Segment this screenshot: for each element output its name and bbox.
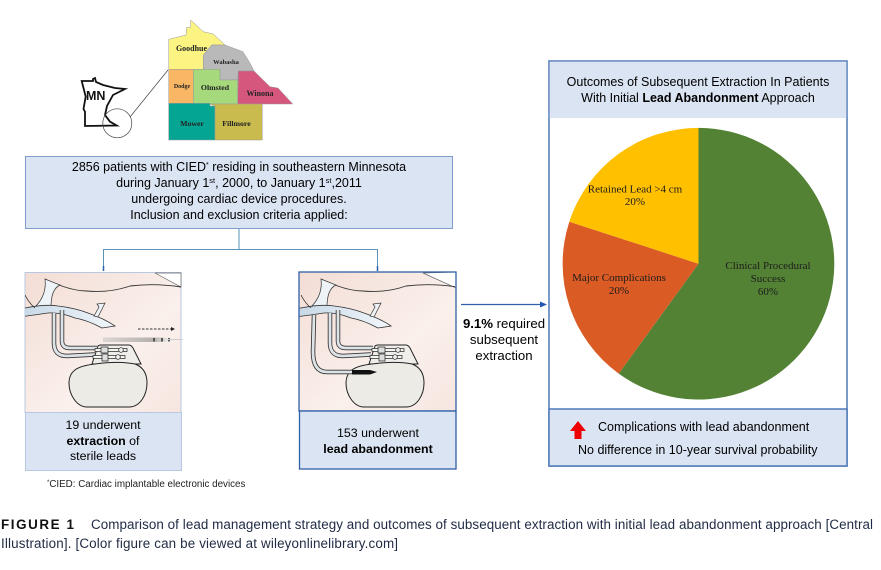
panel: outcome summary: Complications with lead abandonment	[598, 420, 810, 434]
text: required subsequent extraction: 9.1% required	[463, 316, 545, 331]
slice: clinical procedural success 60%	[619, 128, 834, 400]
slice: clinical procedural success 60%: 60%	[758, 286, 778, 298]
heading: outcomes title	[550, 62, 846, 118]
caption: Comparison of lead management strategy and outcomes of subsequent extraction with initial lead abandonment approach [Central	[91, 517, 873, 532]
slice: clinical procedural success 60%: Clinical Procedural	[725, 260, 811, 272]
map: southeastern Minnesota counties	[82, 20, 293, 140]
panel: abandonment result: 153 underwent	[337, 426, 420, 440]
caption	[1, 517, 873, 551]
slice: retained lead 20%: Retained Lead >4 cm	[588, 184, 683, 196]
arrow: split to two strategies	[104, 229, 378, 271]
text: required subsequent extraction: extraction	[475, 348, 533, 363]
county: Goodhue	[169, 20, 225, 69]
county: Goodhue: Goodhue	[176, 44, 208, 53]
panel: sterile lead extraction illustration	[19, 272, 183, 412]
county: Dodge: Dodge	[174, 84, 190, 90]
footnote: CIED definition: CIED: Cardiac implantable electronic devices	[49, 479, 245, 490]
panel: patient population text box: Inclusion and exclusion criteria applied:	[130, 208, 348, 222]
panel: patient population text box: undergoing cardiac device procedures.	[131, 192, 347, 206]
panel: abandonment result	[300, 411, 456, 469]
arrow: extraction direction	[138, 327, 175, 331]
panel: patient population text box: , 2000, to January 1	[215, 176, 326, 190]
panel: patient population text box: st	[326, 176, 332, 185]
panel: lead abandonment illustration	[295, 272, 457, 411]
slice: major complications 20%: Major Complications	[572, 272, 666, 284]
arrow: to outcomes panel	[461, 302, 547, 308]
panel: patient population text box: 2856 patients with CIED	[72, 160, 206, 174]
text: required subsequent extraction	[463, 316, 545, 363]
caption: Illustration]. [Color figure can be viewed at wileyonlinelibrary.com]	[1, 536, 398, 551]
county: Olmsted	[193, 69, 238, 104]
county: Winona: Winona	[247, 89, 273, 98]
panel: patient population text box	[26, 156, 452, 228]
panel: patient population text box: ,2011	[331, 176, 362, 190]
icon: Minnesota outline: MN	[86, 89, 105, 103]
icon: Minnesota outline	[82, 78, 125, 126]
panel: extraction result	[26, 412, 182, 470]
panel: abandonment result: lead abandonment	[323, 442, 433, 456]
panel: extraction result: 19 underwent	[65, 418, 141, 432]
panel: extraction result: extraction of	[66, 434, 140, 448]
extracted lead	[103, 338, 183, 342]
panel: patient population text box: residing in southeastern Minnesota	[209, 160, 406, 174]
pie chart	[563, 128, 834, 400]
slice: major complications 20%: 20%	[609, 285, 629, 297]
county: Fillmore: Fillmore	[222, 119, 251, 128]
panel: outcomes	[549, 61, 847, 466]
panel: outcome summary	[549, 409, 847, 466]
panel: extraction result: sterile leads	[70, 449, 136, 463]
county: Winona	[238, 71, 293, 104]
footnote: CIED definition: *	[47, 480, 50, 486]
county: Wabasha: Wabasha	[213, 59, 240, 66]
county: Wabasha	[203, 45, 254, 80]
slice: major complications 20%	[563, 222, 698, 374]
slice: retained lead 20%: 20%	[625, 196, 645, 208]
slice: clinical procedural success 60%: Success	[751, 273, 785, 285]
heading: outcomes title: Outcomes of Subsequent Extraction In Patients	[567, 75, 829, 89]
slice: retained lead 20%	[569, 128, 698, 264]
panel: patient population text box: during January 1	[116, 176, 209, 190]
abandoned lead	[313, 315, 377, 374]
panel: patient population text box: *	[206, 162, 209, 169]
county: Mower	[169, 103, 215, 140]
heading: outcomes title: With Initial Lead Abandonment Approach	[581, 91, 815, 105]
county: Olmsted: Olmsted	[201, 83, 230, 92]
panel: outcome summary: No difference in 10-year survival probability	[578, 443, 818, 457]
county: Fillmore	[210, 104, 262, 140]
county: Mower: Mower	[180, 119, 204, 128]
county: Dodge	[169, 69, 193, 103]
icon: red up arrow	[570, 421, 586, 439]
panel: patient population text box: st	[209, 176, 216, 185]
caption: FIGURE 1	[1, 517, 75, 532]
text: required subsequent extraction: subsequent	[470, 332, 538, 347]
